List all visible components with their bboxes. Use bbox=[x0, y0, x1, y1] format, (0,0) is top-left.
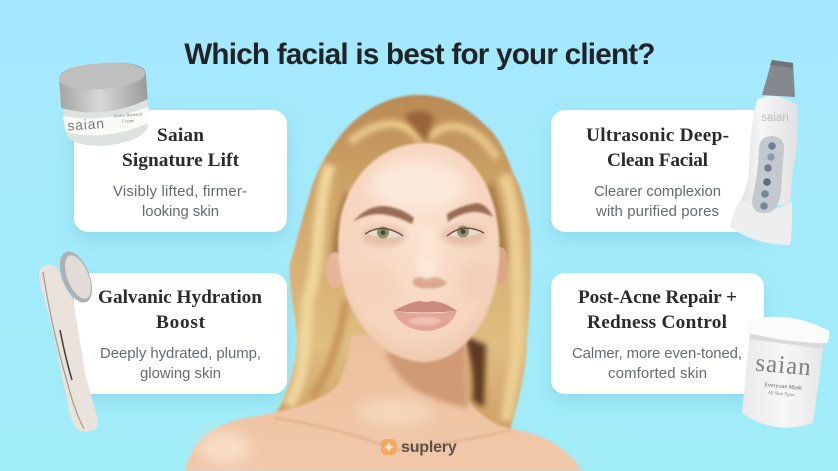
panel: Galvanic Hydration Boost bbox=[74, 273, 287, 394]
panel: Saian Signature Lift: Visibly lifted, firmer- bbox=[113, 184, 247, 200]
icon: galvanic device bbox=[39, 247, 99, 431]
icon: ultrasonic device bbox=[730, 60, 798, 245]
panel: Galvanic Hydration Boost: glowing skin bbox=[140, 366, 221, 382]
title: Which facial is best for your client? bbox=[184, 38, 655, 71]
panel: Galvanic Hydration Boost: Deeply hydrated, plump, bbox=[100, 346, 261, 362]
right eye bbox=[442, 224, 486, 246]
panel: Ultrasonic Deep-Clean Facial: Clearer complexion bbox=[594, 184, 721, 200]
icon: cream jar: Active Renewal bbox=[113, 111, 143, 118]
icon: cream jar bbox=[58, 60, 151, 148]
icon: mask tub bbox=[742, 317, 829, 428]
right eyebrow bbox=[447, 203, 493, 222]
nose bbox=[412, 277, 447, 288]
lips bbox=[393, 301, 457, 331]
panel: Galvanic Hydration Boost: Boost bbox=[156, 312, 206, 333]
panel: Post-Acne Repair + Redness Control bbox=[551, 273, 764, 394]
panel: Ultrasonic Deep-Clean Facial: with purified pores bbox=[595, 204, 719, 220]
left eyebrow bbox=[353, 206, 414, 224]
panel: Saian Signature Lift: Saian bbox=[157, 125, 204, 146]
panel: Post-Acne Repair + Redness Control: comforted skin bbox=[608, 366, 707, 382]
icon: logo mark bbox=[381, 439, 397, 455]
panel: Galvanic Hydration Boost: Galvanic Hydration bbox=[98, 287, 262, 308]
panel: Saian Signature Lift: Signature Lift bbox=[122, 150, 240, 171]
logo: suplery: suplery bbox=[401, 439, 457, 456]
panel: Saian Signature Lift: looking skin bbox=[142, 204, 219, 220]
icon: cream jar: Creme bbox=[122, 118, 134, 124]
panel: Post-Acne Repair + Redness Control: Redness Control bbox=[587, 312, 728, 333]
panel: Post-Acne Repair + Redness Control: Post-Acne Repair + bbox=[578, 287, 737, 308]
left eye bbox=[362, 225, 406, 247]
panel: Post-Acne Repair + Redness Control: Calmer, more even-toned, bbox=[572, 346, 742, 362]
icon: mask tub: All Skin Types bbox=[768, 390, 795, 397]
panel: Ultrasonic Deep-Clean Facial bbox=[551, 110, 764, 232]
device button panel bbox=[752, 136, 784, 213]
portrait of woman bbox=[185, 95, 583, 471]
panel: Ultrasonic Deep-Clean Facial: Ultrasonic Deep- bbox=[586, 125, 729, 146]
panel: Ultrasonic Deep-Clean Facial: Clean Facial bbox=[607, 150, 709, 171]
icon: mask tub: Everyone Mask bbox=[764, 382, 802, 392]
icon: cream jar: saian bbox=[67, 115, 105, 134]
icon: ultrasonic device: saian bbox=[761, 112, 789, 124]
panel: Saian Signature Lift bbox=[74, 110, 287, 232]
icon: mask tub: saian bbox=[754, 350, 813, 381]
